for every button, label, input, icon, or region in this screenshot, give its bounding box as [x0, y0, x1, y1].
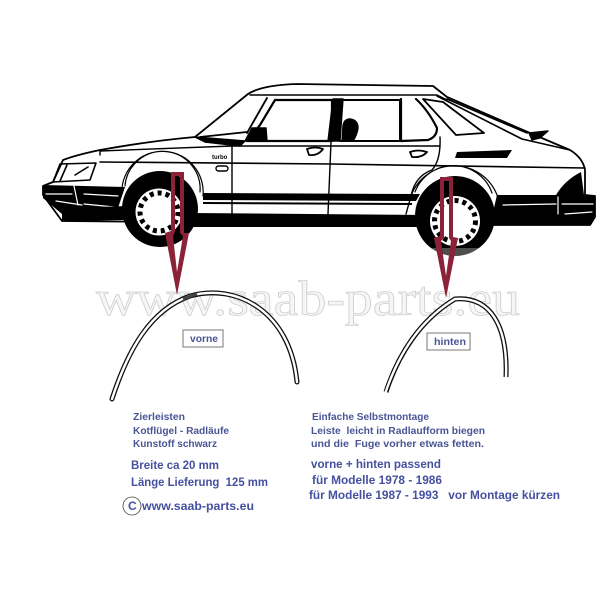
- black side strip: [455, 150, 512, 158]
- tail light: [556, 172, 584, 195]
- front valance: [62, 206, 128, 221]
- rear bumper: [490, 195, 595, 225]
- text block: product description: Kunstoff schwarz: [133, 439, 217, 450]
- rear wheel arch: [411, 166, 503, 218]
- mirror: [245, 128, 267, 141]
- rear wheel arch trim: [385, 299, 506, 394]
- trim body: [112, 293, 297, 399]
- watermark: www.saab-parts.eu: www.saab-parts.eu: [96, 270, 520, 326]
- headlight: [53, 163, 96, 182]
- copyright and website: www.saab-parts.eu: [141, 499, 254, 513]
- rear wheel: [415, 176, 495, 258]
- sill black bands: [190, 193, 430, 227]
- front wheel: [122, 171, 198, 247]
- door handles: [307, 148, 427, 157]
- arrow: rear wheel to rear trim: [434, 177, 458, 298]
- text block: installation notes: Leiste leicht in Radlaufform biegen: [311, 426, 485, 437]
- hatch strip lines: [437, 96, 570, 150]
- trim joint: [183, 294, 197, 299]
- side marker: [216, 166, 228, 171]
- label: hinten: hinten: [434, 337, 466, 348]
- front bumper highlights: [46, 186, 118, 207]
- trim centre highlight: [385, 299, 506, 394]
- front wheel arch trim: [112, 293, 297, 399]
- shoulder line: [100, 146, 440, 155]
- trim centre highlight: [112, 293, 297, 399]
- label: hinten: [427, 333, 470, 350]
- text block: product description: Kotflügel - Radläufe: [133, 426, 229, 437]
- text block: dimensions: Länge Lieferung 125 mm: [131, 475, 268, 489]
- passenger head: [342, 119, 358, 141]
- text block: model fitment: [309, 457, 560, 502]
- front bumper: [43, 185, 125, 214]
- text block: installation notes: Einfache Selbstmontage: [312, 412, 429, 423]
- text block: model fitment: vorne + hinten passend: [311, 457, 441, 471]
- front wheel arch: [122, 151, 203, 196]
- rear bumper highlights: [503, 197, 593, 214]
- text block: installation notes: [311, 412, 485, 450]
- car side view illustration: [43, 84, 595, 258]
- text block: product description: Zierleisten: [133, 412, 185, 423]
- spoiler: [529, 131, 548, 140]
- C pillar window: [401, 99, 437, 141]
- wiper and cowl: [195, 137, 245, 146]
- text block: model fitment: für Modelle 1978 - 1986: [312, 473, 442, 487]
- door shut lines: [232, 137, 440, 214]
- character line: [100, 162, 585, 168]
- label: vorne: [183, 330, 223, 347]
- text block: product description: [133, 412, 229, 450]
- text block: installation notes: und die Fuge vorher etwas fetten.: [311, 439, 484, 450]
- turbo badge: turbo: [212, 155, 228, 161]
- front door window: [247, 100, 332, 141]
- arrow: front wheel to front trim: [165, 172, 189, 295]
- label: vorne: vorne: [190, 334, 218, 345]
- text block: dimensions: Breite ca 20 mm: [131, 458, 219, 472]
- windshield and front pillar: [200, 98, 267, 137]
- text block: model fitment: für Modelle 1987 - 1993 vor Montage kürzen: [309, 488, 560, 502]
- roof lines: [250, 95, 447, 100]
- copyright and website: C: [128, 499, 137, 513]
- car body outline: [43, 84, 595, 225]
- B pillar: [328, 99, 343, 141]
- rear door window: [340, 100, 400, 141]
- trim body: [386, 299, 506, 392]
- text block: dimensions: [131, 458, 268, 489]
- copyright and website: [123, 497, 254, 515]
- rear triangular window: [423, 99, 484, 135]
